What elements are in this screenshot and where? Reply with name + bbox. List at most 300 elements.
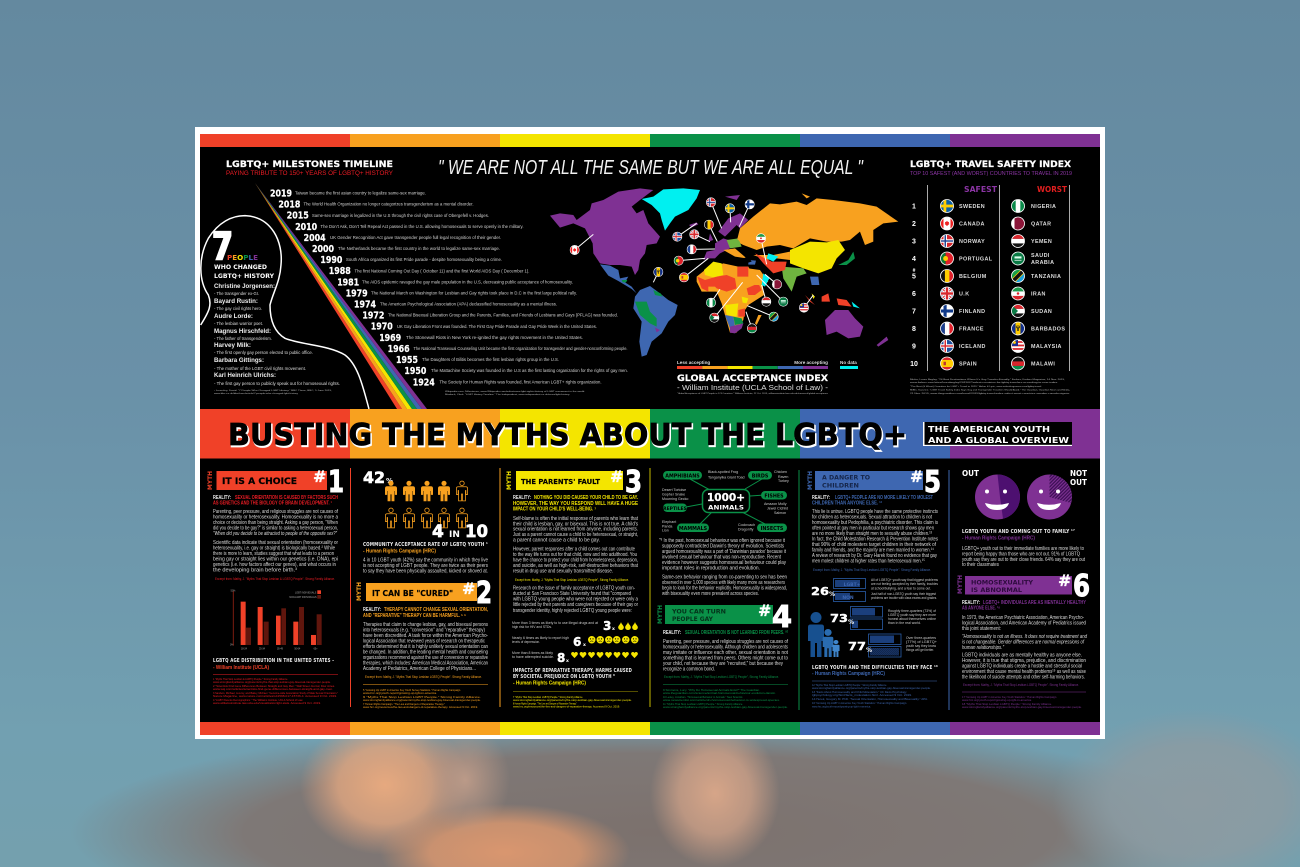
travel footnotes: [910, 378, 1071, 395]
myth 6 text: logical Association, and American Academy of Pediatrics issued: [962, 620, 1086, 626]
stat: 26 percent bars: [811, 578, 938, 602]
travel safety table: 5: [912, 274, 916, 280]
myth 4 references: 9 Simmons, Lucy. "Why Do Homosexual Animals Exist?" The Guardian.: [663, 689, 760, 692]
myth 6 text: However, it is true that stigma, prejudice, and discrimination: [962, 658, 1086, 664]
myth 1 text: [213, 495, 338, 581]
myth 4 header: MYTH: [657, 605, 664, 624]
myth 5 references: [812, 684, 931, 708]
myth 4 header: PEOPLE GAY: [672, 615, 713, 623]
stat: 26 percent bars: 26: [811, 585, 829, 598]
myth 3 references: www.strongfamilyalliance.org/parents/myths-stop-lesbian-gay-bisexual-transgender-people.: [513, 699, 632, 702]
travel safety table: NORWAY: [959, 239, 985, 245]
travel safety table: 9: [912, 344, 916, 350]
myth 4 header: [657, 600, 792, 635]
myth 4 intro text: important roles in reproduction and evolution.: [662, 566, 760, 572]
myth 1 references: www.williamsinstitute.law.ucla.edu/visualization/lgbt-stats. Accessed 9 Oct. 2019.: [213, 702, 321, 705]
myth 5 references: 13 "Facts About Homosexuality and Child Molestation." UC Davis Psychology.: [812, 691, 907, 694]
people list: - Levesley, David. "7 People Who Changed LGBT History." BBC Three, BBC, 5 June 2019,: [214, 389, 333, 392]
map legend: GLOBAL ACCEPTANCE INDEX: [677, 374, 828, 384]
timeline events: Wikipedia.com, Milestones, www.Wikipedia.com/milestones-lgbt-rights-history of LGBT movement in the world.: [445, 390, 586, 393]
travel safety table: 6: [912, 291, 916, 298]
travel safety table: PORTUGAL: [959, 256, 993, 262]
middle rainbow band: [200, 409, 1100, 458]
timeline events: 1950: [404, 366, 427, 377]
myth 2 text: into heterosexuals (e.g. "conversion" and "reparative" therapy): [363, 628, 485, 634]
myth 4 text: something that is learned from peers. Others might come out to: [663, 656, 788, 662]
myth 6 text: the likelihood of suicide attempts and other self-harming behaviors.: [962, 674, 1085, 680]
myth 5 text: In fact, the Child Molestation Research & Prevention Institute notes: [812, 536, 938, 542]
impacts caption: IMPACTS OF REPARATIVE THERAPY, HARMS CAUSED: [513, 668, 632, 674]
quote: " WE ARE NOT ALL THE SAME BUT WE ARE ALL EQUAL ": [438, 157, 864, 179]
difficulties caption: [812, 664, 938, 681]
stat row: 3 times: [512, 619, 638, 633]
bar chart: LGBTQ age distribution: 25-34: [259, 649, 266, 651]
myth 5 references: lgbpsychology.org/html/facts_molestation.html. Accessed 9 Oct. 2019.: [812, 694, 912, 697]
myth 2 references: [363, 689, 482, 709]
stat row: 3 times: 3: [603, 619, 611, 633]
map: Europe, Africa and Middle East: [697, 238, 787, 333]
people list: Harvey Milk:: [214, 342, 251, 349]
myth 4 header: #: [758, 601, 771, 620]
myth 3 references: 8 Human Rights Campaign. "The Lies and Dangers of Reparative Therapy.": [513, 702, 577, 706]
network diagram: 1000+ animals: 1000+: [707, 492, 745, 504]
myth 6 text: environment that cause mental health problems¹⁹ as well as raise: [962, 669, 1086, 675]
people list: Bayard Rustin:: [214, 298, 258, 305]
network diagram: 1000+ animals: Jewel Cichlid: [767, 506, 788, 510]
stat: 26 percent bars: LGBT+: [844, 582, 861, 588]
network diagram: 1000+ animals: Salmon: [774, 511, 786, 515]
travel safety heading: LGBTQ+ TRAVEL SAFETY INDEX: [910, 160, 1071, 170]
timeline events: [270, 188, 628, 396]
subtitle box: [923, 422, 1072, 446]
myth 2 references: www.strongfamilyalliance.org/parents/myths-stop-lesbian-gay-bisexual-transgender-people.: [363, 699, 481, 702]
poster frame: [195, 127, 1105, 739]
heading: milestones timeline: LGBTQ+ MILESTONES TIMELINE: [226, 160, 393, 170]
myth 1 header: #: [313, 467, 326, 486]
timeline events: Taiwan became the first asian country to legalize same-sex marriage.: [295, 191, 426, 196]
myth 4 text: recognize a common bond.: [663, 666, 715, 672]
coming out text: LGBTQ YOUTH AND COMING OUT TO FAMILY ¹⁷: [962, 528, 1075, 535]
coming out text: [962, 528, 1085, 568]
panel: myth 5: [807, 465, 941, 708]
stat: 77 percent bars: %: [866, 647, 872, 654]
people list: Magnus Hirschfeld:: [214, 328, 271, 335]
timeline events: The American Psychological Association (APA) declassified homosexuality as a mental illness.: [380, 302, 557, 307]
travel safety table: WORST: [1037, 185, 1068, 194]
stat: 26 percent bars: Just half of non-LGBTQ youth say their biggest: [871, 592, 936, 596]
myth 4 text: Parenting, peer pressure, and religious struggles are not causes of: [663, 639, 788, 645]
myth 1 references: 4 "LGBT Parents Demographics." The Williams Institute, UCLA School of Law.: [213, 699, 303, 702]
myth 6 text: REALITY:: [962, 600, 980, 606]
difficulties caption: LGBTQ YOUTH AND THE DIFFICULTIES THEY FACE ¹⁶: [812, 664, 938, 671]
myth 4 intro text: evidence however suggests homosexual behaviour could play: [662, 560, 786, 566]
myth 4 text: REALITY:: [663, 630, 681, 636]
stat: 77 percent bars: [848, 634, 937, 657]
column dividers: [350, 468, 949, 710]
myth 1 text: Excerpt from: Mathy, J. "Myths That Stop Lesbian & LGBTQ People". Strong Family Alliance.: [215, 577, 335, 581]
people list: Christine Jorgensen:: [214, 283, 275, 290]
myth 4 text: [663, 630, 788, 684]
difficulties caption: - Human Rights Campaign (HRC): [812, 671, 885, 677]
network diagram: 1000+ animals: Gopher Snake: [662, 492, 685, 496]
myth 5 text: REALITY:: [812, 495, 830, 501]
myth 3 text: Just as a parent cannot cause a child to be heterosexual, or straight,: [513, 532, 638, 538]
timeline events: The first National Coming Out Day ( October 11) and the first World AIDS Day ( December 1).: [354, 268, 530, 273]
myth 1 text: Scientific data indicate that sexual orientation (homosexuality or: [213, 540, 338, 546]
people list: - The gay civil rights hero.: [214, 306, 262, 311]
myth 4 header: 4: [772, 600, 792, 635]
network diagram: 1000+ animals: Dragonfly: [738, 528, 754, 532]
myth 6 text: In 1973, the American Psychiatric Association, American Psycho-: [962, 615, 1084, 621]
travel safety table: YEMEN: [1031, 239, 1052, 245]
travel safety table: SUDAN: [1031, 309, 1052, 315]
myth 5 text: This lie is untrue. LGBTQ people have the same protective instincts: [812, 509, 938, 515]
myth 6 text: human relationships.": [962, 645, 1005, 651]
travel safety table: FINLAND: [959, 309, 985, 315]
myth 3 text: and suicide, as well as high-risk, self-destructive behaviors that: [513, 563, 638, 569]
timeline events: Mindock, Clark. "LGBT History Timeline." The Independent, www.independent.co.uk/news/lgbt-history.: [445, 393, 571, 396]
travel footnotes: "The Best (& Worst) Countries for LGBT+ Travel in 2019." Asher & Lyric, www.asherfergusson.com/lgbtq-travel.: [910, 385, 1043, 388]
subtitle box: AND A GLOBAL OVERVIEW: [928, 435, 1069, 445]
myth 4 intro text: "⁹ In the past, homosexual behaviour was often ignored because it: [659, 538, 785, 544]
myth 1 references: Nature Magazine, www.nature.com/articles/s41598-017-15736-4. Accessed 9 Oct. 2019.: [213, 695, 337, 698]
myth 4 references: 10 Lesley, Jonathan. "Homosexual Behavior in Animals." New Scientist.: [663, 696, 743, 699]
myth 5 references: 12 "Myths That Stop Lesbian LGBTQ People." Strong Family Alliance.: [812, 684, 887, 687]
myth 1 text: genetics (i.e. how factors affect our genes), and what occurs in: [213, 562, 336, 568]
network diagram: 1000+ animals: Panda: [662, 524, 672, 528]
travel safety table: 4: [912, 256, 916, 263]
travel safety table: [910, 185, 1070, 371]
stat row: 3 times: More than 3 times as likely to to use illegal drugs and at: [512, 621, 598, 625]
network diagram: 1000+ animals: Chicken: [774, 470, 787, 474]
rainbow prism: [255, 183, 427, 409]
timeline events: 1990: [320, 255, 343, 266]
smiley chart: not out: [1027, 474, 1072, 520]
bar chart: LGBTQ age distribution: [230, 590, 322, 651]
timeline events: The Daughters of Bilitis becomes the first lesbian rights group in the U.S.: [422, 357, 559, 362]
myth 3 text: ducted at San Francisco State University found that "compared: [513, 591, 631, 597]
myth 2 text: organizations recommend against the use of conversion or reparative: [363, 655, 488, 661]
stat: 77 percent bars: youth say they know: [906, 644, 936, 648]
myth 4 text: Except from: Mathy, J. "Myths That Stop Lesbian LGBTQ People", Strong Family Alliance.: [664, 675, 779, 679]
stat: 77 percent bars: (77%) of LGBTQ+: [906, 640, 937, 644]
myth 5 text: are no more likely than straight men to sexually abuse children.¹³: [812, 531, 932, 537]
map legend: - William Institute (UCLA School of Law) -: [677, 383, 829, 392]
stat: 26 percent bars: are not feeling accepted by their family, troubles: [871, 582, 938, 586]
network diagram: 1000+ animals: [662, 470, 789, 532]
myth 5 text: CHILDREN THAN ANYONE ELSE. ¹²: [812, 500, 882, 506]
travel safety table: IRAN: [1031, 292, 1046, 298]
travel safety table: BARBADOS: [1031, 326, 1065, 332]
people list: - The first openly gay person elected to public office.: [214, 350, 313, 355]
myth 1 header: MYTH: [207, 471, 214, 490]
myth 3 text: HOWEVER, THE WAY YOU RESPOND WILL HAVE A HUGE: [513, 501, 639, 507]
myth 6 header: IS ABNORMAL: [971, 586, 1022, 594]
myth 1 references: 1 "Myths That Stop Lesbian & LGBTQ People." Strong Family Alliance.: [213, 678, 288, 681]
myth 3 text: their child is lesbian, gay, or bisexual. This is not true. A child's: [513, 522, 638, 528]
myth 6 text: LGBTQ+ INDIVIDUALS ARE AS MENTALLY HEALTHY: [983, 600, 1087, 606]
stat: 73 percent bars: 73: [830, 612, 848, 625]
panel: animals and myth 4: [657, 470, 792, 709]
myth 6 header: [957, 569, 1090, 604]
timeline events: The World Health Organization no longer categorizes transgenderism as a mental disorder.: [304, 202, 474, 207]
myth 3 text: [513, 495, 639, 614]
myth 2 text: have been discredited. A task force within the American Psycho-: [363, 633, 488, 639]
timeline events: 2004: [304, 233, 326, 244]
map legend: More accepting: [794, 360, 828, 365]
people heading: LGBTQ+ HISTORY: [214, 273, 275, 280]
world map: global acceptance index: [550, 188, 898, 357]
stat row: 6 times: levels of depression.: [512, 640, 540, 644]
myth 6 references: [962, 696, 1082, 709]
myth 4 intro text: observed in over 1,000 species with likely many more as researchers: [662, 580, 785, 586]
people heading: PEOPLE: [227, 254, 258, 262]
myth 5 text: Excerpt from: Mathy, J. "Myths That Stop Lesbian LGBTQ People". Strong Family Alliance.: [813, 568, 931, 572]
myth 5 header: CHILDREN: [822, 482, 859, 490]
head silhouette outline: [201, 216, 369, 409]
myth 3 text: result in drug use and sexually transmitted disease.: [513, 568, 613, 574]
myth 4 header: YOU CAN TURN: [671, 608, 726, 616]
timeline events: The Mattachine Society was founded in the U.S as the first lasting organization for the rights of gay men.: [431, 368, 628, 373]
myth 1 header: IT IS A CHOICE: [222, 477, 297, 487]
travel safety table: #: [913, 268, 916, 274]
main title: BUSTING THE MYTHS ABOUT THE LGBTQ+: [228, 418, 907, 453]
people heading: [214, 254, 275, 280]
myth 1 references: 3 Sanders, Michael, Jeremy, and Bailey, Michael. "Genome-wide Association Study of Male Sexual Orientation.": [213, 692, 338, 695]
travel safety table: QATAR: [1031, 222, 1051, 228]
stat: 26 percent bars: NON: [842, 595, 854, 601]
travel safety table: SWEDEN: [959, 204, 985, 210]
people list: [214, 283, 340, 395]
stat: 73 percent bars: than in the real world.: [888, 621, 921, 625]
myth 5 text: A review of research by Dr. Gary Harek found no evidence that gay: [812, 553, 937, 559]
stat: 73 percent bars: Roughly three-quarters (73%) of: [888, 609, 936, 613]
coming out text: to their classmates: [962, 562, 999, 568]
myth 1 text: REALITY:: [213, 495, 231, 501]
smiley chart: out: [975, 474, 1020, 520]
myth 3 references: 7 "Myths That Stop Lesbian LGBTQ People." Strong Family Alliance.: [513, 696, 583, 699]
stat: 4 in 10: 10: [465, 522, 488, 542]
myth 4 references: www.theguardian.com/science/animal-homosexual-behaviour-evolution-darwin.: [663, 692, 777, 695]
myth 2 header: [356, 576, 492, 611]
myth 2 references: www.hrc.org/youth-report/growing-up-lgbt-in-america.: [363, 692, 437, 695]
travel safety heading: TOP 10 SAFEST (AND WORST) COUNTRIES TO TRAVEL IN 2019: [910, 171, 1072, 177]
travel footnotes: Misha, Laura Begley. "24 Best Destinations Where It's Gay Traveler-Friendly." Forbes, Forbes Magazine, 14 Nov. 2019,: [910, 378, 1066, 381]
myth 3 text: a parent cannot cause a child to be gay.: [513, 538, 600, 544]
myth 5 text: for children as heterosexuals. Sexual attraction to children is not: [812, 514, 932, 520]
coming out text: youth say they are out to their close friends. 64% say they are out: [962, 557, 1085, 563]
myth 4 text: may imitate or influence each other, sexual orientation is not: [663, 650, 788, 656]
network diagram: 1000+ animals: Mourning Gecko: [662, 497, 688, 501]
coming out text: - Human Rights Campaign (HRC): [962, 536, 1035, 542]
timeline events: 2015: [287, 211, 309, 222]
myth 2 references: 7 Human Rights Campaign. "The Lies and Dangers of Reparative Therapy.": [363, 703, 445, 706]
myth 2 text: AND "REPARATIVE" THERAPY CAN BE HARMFUL. ⁵ ⁶: [363, 613, 466, 619]
stat: 4 in 10: [432, 522, 488, 542]
people list: - The mother of the LGBT civil rights movement.: [214, 366, 306, 371]
travel safety table: SPAIN: [959, 362, 977, 368]
myth 4 intro text: supposedly contradicted Darwin's theory of evolution. Scientists: [662, 544, 784, 550]
myth 3 text: sexual orientation is not learned from anyone, including parents.: [513, 526, 638, 532]
bar chart: LGBTQ age distribution: 65+: [314, 649, 318, 651]
timeline events: 1981: [337, 277, 359, 288]
timeline events: The Society for Human Rights was founded, first American LGBT+ rights organization.: [440, 380, 602, 385]
travel safety table: U.K: [959, 292, 969, 298]
myth 4 references: [663, 689, 788, 709]
big number 7: 7: [212, 225, 233, 268]
stat: 26 percent bars: %: [829, 591, 835, 598]
myth 2 text: Excerpt from: Mathy, J. "Myths That Stop Lesbian LGBTQ People". Strong Family Alliance.: [365, 675, 482, 679]
myth 5 text: LGBTQ+ PEOPLE ARE NO MORE LIKELY TO MOLEST: [835, 495, 933, 501]
icon: family: [808, 612, 840, 657]
network diagram: 1000+ animals: Desert Tortoise: [662, 488, 686, 492]
heading: milestones timeline: PAYING TRIBUTE TO 150+ YEARS OF LGBTQ+ HISTORY: [226, 170, 394, 177]
labels: out / not out: OUT: [962, 469, 980, 478]
myth 2 text: Academy of Pediatrics, American College of Physicians...: [363, 666, 476, 672]
stat row: 8 times: x: [566, 659, 569, 664]
community acceptance text: 4 in 10 LGBT youth (42%) say the community in which they live: [363, 558, 488, 564]
timeline events: 2000: [312, 244, 334, 255]
timeline events: 1972: [362, 311, 384, 322]
network diagram: 1000+ animals: Raven: [778, 475, 788, 479]
myth 3 header: [506, 465, 642, 500]
timeline events: The National Bisexual Liberation Group and the Parents, Families, and Friends of Lesbians and Gays (PFLAG) was founded.: [388, 313, 618, 318]
stat: 26 percent bars: All of LGBTQ+ youth say that biggest problems: [871, 578, 938, 582]
timeline events: 2010: [295, 222, 318, 233]
myth 5 header: 5: [924, 465, 941, 500]
myth 6 header: 6: [1073, 569, 1090, 604]
community acceptance text: [363, 541, 488, 574]
myth 6 text: AS ANYONE ELSE. ¹⁸: [962, 606, 1000, 612]
timeline events: The Netherlands became the first country in the world to legalize same-sex marriage.: [338, 246, 500, 251]
myth 3 text: little rejected by their parents and caregivers because of their gay or: [513, 602, 638, 608]
travel safety table: SAUDI: [1031, 253, 1050, 259]
myth 2 header: MYTH: [356, 582, 363, 601]
map legend: [677, 360, 858, 395]
stat row: 8 times: More than 8 times as likely: [512, 651, 553, 655]
myth 5 text: family and friends, and the majority are men married to women.¹⁴: [812, 548, 935, 554]
panel: coming out and myth 6: [957, 469, 1090, 709]
stat row: 6 times: 6: [573, 635, 581, 649]
myth 5 references: www.hrc.org/youth-report/growing-up-lgbt-in-america.: [812, 706, 871, 708]
heading: milestones timeline: [226, 160, 394, 177]
myth 2 text: efforts determined that it is highly unlikely sexual orientation can: [363, 644, 488, 650]
travel safety table: ICELAND: [959, 344, 986, 350]
myth 6 header: #: [1058, 571, 1071, 590]
people list: - The transgender ex-GI.: [214, 291, 259, 296]
travel safety table: TANZANIA: [1031, 274, 1061, 280]
panel: myth 1: [207, 465, 344, 705]
myth 1 text: AS GENETICS AND THE BIOLOGY OF BRAIN DEVELOPMENT. ¹: [213, 500, 332, 506]
myth 6 references: www.strongfamilyalliance.org/parents/myths-stop-lesbian-gay-bisexual-transgender-people.: [962, 706, 1082, 709]
labels: out / not out: [962, 469, 1088, 487]
myth 6 references: www.hrc.org/youth-report/growing-up-lgbt-in-america.: [962, 699, 1032, 702]
coming out text: LGBTQ+ youth out to their immediate families are more likely to: [962, 546, 1084, 552]
people list: Karl Heinrich Ulrichs:: [214, 372, 276, 379]
travel safety table: NIGERIA: [1031, 204, 1056, 210]
stat: 73 percent bars: LGBTQ youth say they are more: [888, 613, 936, 617]
bar chart: LGBTQ age distribution: 50%: [231, 591, 235, 593]
timeline events: Same-sex marriage is legalized in the U.S through the civil rights case of Obergefell v. Hodges.: [312, 213, 489, 218]
myth 3 text: Research on the issue of family acceptance of LGBTQ youth con-: [513, 586, 635, 592]
myth 6 text: is not changeable. Gender differences are normal expressions of: [962, 640, 1084, 646]
travel safety table: 8: [912, 326, 916, 333]
impacts caption: BY SOCIETAL PREJUDICE ON LGBTQ YOUTH ⁸: [513, 673, 615, 680]
stat row: 8 times: 8: [557, 651, 565, 665]
myth 5 text: that 90% of child molesters target children in their network of: [812, 542, 936, 548]
subtitle box: THE AMERICAN YOUTH: [928, 424, 1050, 434]
myth 5 header: MYTH: [807, 471, 814, 490]
myth 5 text: homosexuality but Pedophilia, a psychiatric disorder. This claim is: [812, 520, 938, 526]
myth 1 text: homosexuality or heterosexuality. Homosexuality is no more a: [213, 514, 338, 520]
people list: Barbara Gittings:: [214, 357, 264, 364]
myth 2 references: 5 "Growing Up LGBT in America: Key Youth Survey Statistics." Human Rights Campaign.: [363, 689, 461, 692]
labels: out / not out: OUT: [1070, 478, 1088, 487]
travel safety table: 7: [912, 308, 916, 316]
stat: 4 in 10: IN: [449, 530, 460, 540]
myth 3 text: with LGBTQ young people who were not rejected or were only a: [513, 596, 638, 602]
myth 2 header: IT CAN BE "CURED": [372, 589, 453, 598]
myth 1 text: being gay or straight lies within our genetics (i.e. DNA), epi: [213, 556, 338, 562]
travel safety table: 3: [912, 238, 916, 246]
travel safety table: MALAWI: [1031, 362, 1055, 368]
timeline events: The Stonewall Riots in New York re-ignited the gay rights movement in the United States.: [406, 335, 583, 340]
network diagram: 1000+ animals: ANIMALS: [708, 504, 744, 512]
myth 3 references: [513, 696, 632, 708]
timeline events: 1969: [379, 333, 401, 344]
myth 5 references: www.strongfamilyalliance.org/parents/myths-stop-lesbian-gay-bisexual-transgender-people.: [812, 687, 931, 690]
myth 1 references: [213, 678, 338, 705]
myth 2 references: 6 "Myths That Stop Lesbian LGBT People." Strong Family Alliance.: [363, 696, 482, 699]
community acceptance text: is not accepting of LGBT people. They are twice as their peers: [363, 563, 488, 569]
network diagram: 1000+ animals: Lion: [662, 528, 669, 532]
stat row: 6 times: [512, 635, 638, 649]
bar chart: LGBTQ age distribution: 0%: [230, 645, 233, 647]
network diagram: 1000+ animals: Amazon Molly: [764, 502, 787, 506]
travel safety heading: [910, 160, 1072, 177]
myth 3 text: transgender identity, highly rejected LGBTQ young people were:: [513, 608, 632, 614]
community acceptance text: to say they have been physically assaulted, kicked or shoved at.: [363, 568, 488, 574]
travel safety table: 10: [910, 361, 918, 368]
myth 5 text: men molest children at higher rates than heterosexual men.¹⁵: [812, 558, 925, 564]
myth 4 references: www.newscientist.com/article/dn-homosexual-behaviour-is-widespread-species.: [663, 699, 780, 702]
myth 5 text: [812, 495, 938, 572]
myth 2 text: [363, 607, 488, 684]
stat: 77 percent bars: Over three-quarters: [906, 636, 936, 640]
myth 2 header: 2: [476, 576, 492, 611]
bottom rainbow bar: [200, 722, 1100, 735]
stat row: 8 times: [512, 651, 638, 665]
myth 5 references: 14 Herek, Gregory M. PhD. "Sexual Orientation, Homosexuality and Bisexuality." APA.: [812, 698, 928, 701]
timeline events: 1979: [346, 288, 368, 299]
myth 3 header: #: [610, 467, 623, 486]
impacts caption: - Human Rights Campaign (HRC): [513, 680, 586, 686]
myth 4 text: SEXUAL ORIENTATION IS NOT LEARNED FROM PEERS. ¹⁰: [685, 630, 788, 636]
myth 6 header: HOMOSEXUALITY: [971, 578, 1033, 586]
stat: 77 percent bars: things will get better.: [906, 648, 934, 652]
myth 4 references: 11 "Myths That Stop Lesbian LGBTQ People." Strong Family Alliance.: [663, 703, 743, 706]
myth 5 header: #: [910, 467, 923, 486]
travel safety table: CANADA: [959, 222, 985, 228]
timeline events: 1988: [329, 266, 351, 277]
myth 2 references: www.hrc.org/resources/the-lies-and-dangers-of-reparative-therapy. Accessed 9 Oct. 2019.: [363, 706, 478, 709]
myth 3 header: MYTH: [506, 471, 513, 490]
myth 3 header: 3: [625, 465, 642, 500]
people list: - The lesbian warrior poet.: [214, 321, 263, 326]
map legend: No data: [840, 360, 857, 365]
timeline events: 1966: [388, 344, 410, 355]
people list: - The first gay person to publicly speak out for homosexual rights.: [214, 381, 340, 386]
